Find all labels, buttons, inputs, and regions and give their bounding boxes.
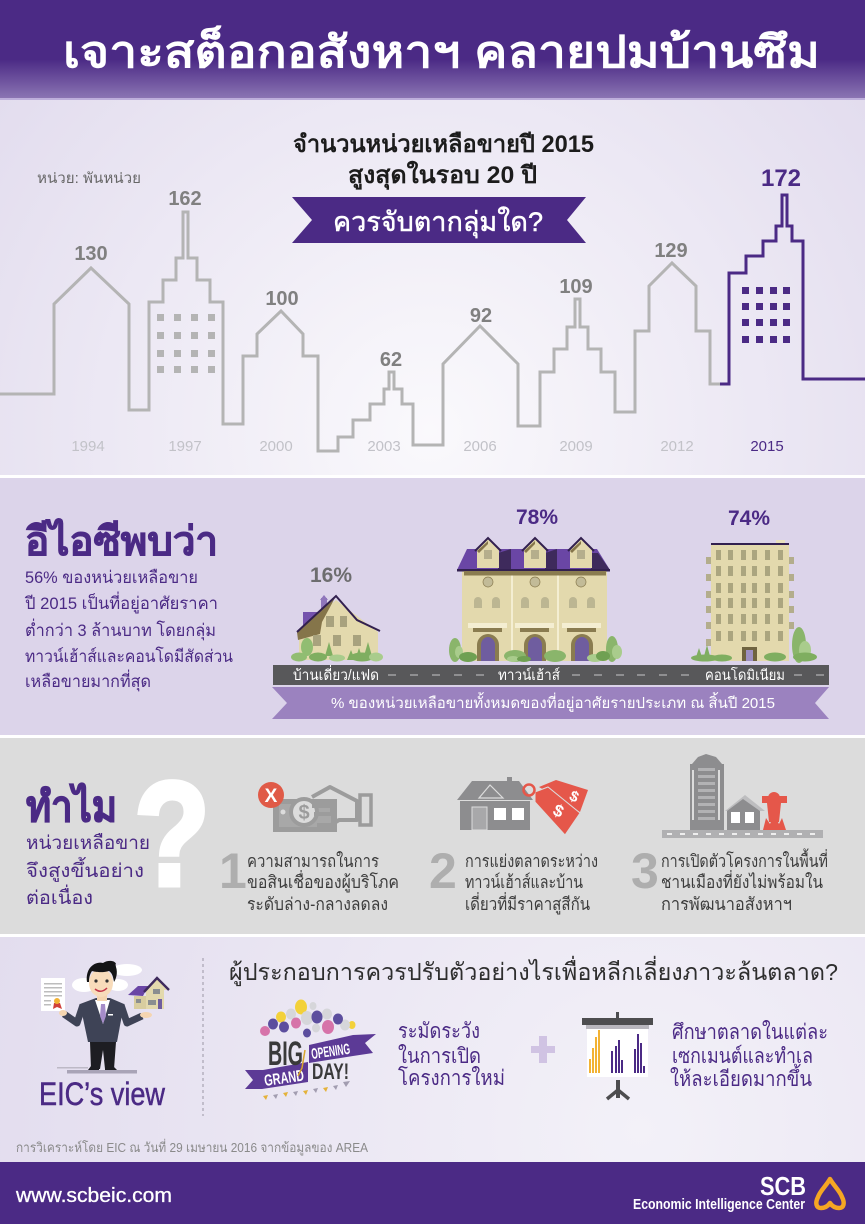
title: เจาะสต็อกอสังหาฯ คลายปมบ้านซึม bbox=[63, 25, 820, 77]
finding paragraph: ปี 2015 เป็นที่อยู่อาศัยราคา bbox=[24, 591, 218, 614]
callout banner: ควรจับตากลุ่มใด? bbox=[333, 206, 543, 239]
icon: house and price tags: $ bbox=[550, 800, 567, 822]
reason 3: การพัฒนาอสังหาฯ bbox=[661, 894, 792, 914]
footer bbox=[0, 1162, 865, 1224]
percentages: 78% bbox=[516, 506, 558, 529]
subheading: หน่วยเหลือขาย bbox=[26, 833, 150, 854]
reason 1: ระดับล่าง-กลางลดลง bbox=[247, 894, 388, 914]
finding paragraph: ทาวน์เฮ้าส์และคอนโดมีสัดส่วน bbox=[25, 646, 233, 666]
icon: big opening grand day balloons bbox=[245, 1000, 376, 1100]
advice 1 text: ในการเปิด bbox=[398, 1044, 481, 1068]
subheading: จึงสูงขึ้นอย่าง bbox=[26, 857, 144, 882]
plus sign bbox=[531, 1036, 555, 1063]
value labels bbox=[74, 165, 801, 371]
reason 2: ทาวน์เฮ้าส์และบ้าน bbox=[465, 872, 583, 892]
value labels: 109 bbox=[559, 276, 593, 298]
callout banner bbox=[292, 197, 586, 243]
Economic Intelligence Center: Economic Intelligence Center bbox=[633, 1197, 805, 1213]
panel: why unsold units keep rising bbox=[0, 738, 865, 934]
year labels: 2000 bbox=[259, 438, 293, 455]
finding paragraph: เหลือขายมากที่สุด bbox=[25, 669, 151, 692]
icon: house and price tags: $ bbox=[567, 787, 582, 807]
icon: detached house bbox=[291, 595, 383, 662]
illustration: businessman bbox=[41, 961, 169, 1074]
percentages: 16% bbox=[310, 564, 352, 587]
finding paragraph bbox=[24, 568, 233, 692]
icon: house and price tags bbox=[457, 777, 588, 835]
advice 1 text: ระมัดระวัง bbox=[398, 1020, 480, 1043]
value labels: 162 bbox=[168, 188, 202, 210]
year labels: 2012 bbox=[660, 438, 694, 455]
icon: condominium bbox=[691, 540, 817, 663]
panel: EIC's view bbox=[0, 937, 865, 1162]
percentages bbox=[310, 506, 770, 587]
road with type labels: บ้านเดี่ยว/แฟด bbox=[293, 665, 379, 684]
finding paragraph: 56% ของหน่วยเหลือขาย bbox=[25, 568, 198, 587]
value labels: 172 bbox=[761, 165, 801, 192]
icon: big opening grand day balloons: GRAND bbox=[263, 1068, 305, 1090]
panel: EIC finding bbox=[0, 478, 865, 735]
value labels: 100 bbox=[265, 288, 299, 310]
icon: townhouse bbox=[449, 538, 622, 662]
reason 2: การแย่งตลาดระหว่าง bbox=[465, 851, 598, 871]
year labels: 2015 bbox=[750, 438, 784, 455]
icon: credit refused bbox=[258, 782, 371, 832]
heading: EIC found: อีไอซีพบว่า bbox=[25, 518, 218, 564]
value labels: 92 bbox=[470, 305, 492, 327]
question heading: ผู้ประกอบการควรปรับตัวอย่างไรเพื่อหลีกเลี่ยงภาวะล้นตลาด? bbox=[229, 955, 838, 987]
SCB name: SCB bbox=[760, 1171, 806, 1201]
icon: presentation board bbox=[582, 1012, 653, 1099]
road with type labels bbox=[273, 665, 829, 685]
reason 1: ขอสินเชื่อของผู้บริโภค bbox=[247, 870, 399, 893]
reason 1: 1 bbox=[219, 843, 247, 899]
reason 3: การเปิดตัวโครงการในพื้นที่ bbox=[661, 848, 828, 871]
road with type labels: ทาวน์เฮ้าส์ bbox=[498, 667, 560, 684]
icon: suburb tower, house, scarecrow bbox=[662, 754, 823, 838]
year labels: 2003 bbox=[367, 438, 401, 455]
reason 2: 2 bbox=[429, 843, 457, 899]
year labels: 1994 bbox=[71, 438, 105, 455]
percentages: 74% bbox=[728, 507, 770, 530]
windows 2015 bbox=[742, 287, 790, 343]
advice 2 text: เซกเมนต์และทำเล bbox=[672, 1044, 813, 1068]
windows 1997 bbox=[157, 314, 215, 373]
heading: highest in 20 years: จำนวนหน่วยเหลือขายปี 2015 bbox=[293, 131, 594, 158]
year labels bbox=[71, 438, 784, 455]
icon: big opening grand day balloons: BIG bbox=[268, 1035, 303, 1073]
ribbon caption: % ของหน่วยเหลือขายทั้งหมดของที่อยู่อาศัยรายประเภท ณ สิ้นปี 2015 bbox=[331, 692, 775, 712]
reason 3 bbox=[631, 843, 828, 914]
year labels: 2009 bbox=[559, 438, 593, 455]
year labels: 1997 bbox=[168, 438, 202, 455]
finding paragraph: ต่ำกว่า 3 ล้านบาท โดยกลุ่ม bbox=[25, 618, 216, 641]
icon: SCB logo bbox=[816, 1179, 844, 1208]
year labels: 2006 bbox=[463, 438, 497, 455]
advice 2 text: ศึกษาตลาดในแต่ละ bbox=[672, 1020, 828, 1044]
advice 2 text bbox=[670, 1020, 828, 1091]
website: www.scbeic.com bbox=[15, 1185, 172, 1207]
reason 1: ความสามารถในการ bbox=[247, 851, 379, 871]
value labels: 129 bbox=[654, 240, 688, 262]
heading: highest in 20 years: สูงสุดในรอบ 20 ปี bbox=[348, 160, 537, 191]
icon: credit refused: X bbox=[265, 786, 278, 807]
reason 2: เดี่ยวที่มีราคาสูสีกัน bbox=[465, 892, 590, 915]
heading: why: ทำไม bbox=[26, 782, 117, 830]
source note: การวิเคราะห์โดย EIC ณ วันที่ 29 เมษายน 2016 จากข้อมูลของ AREA bbox=[16, 1139, 368, 1156]
icon: big opening grand day balloons: OPENING bbox=[310, 1041, 351, 1063]
reason 3: 3 bbox=[631, 843, 659, 899]
heading: highest in 20 years bbox=[293, 131, 594, 191]
subheading bbox=[26, 833, 150, 909]
panel: skyline chart of unsold units bbox=[0, 100, 865, 475]
skyline line chart grey bbox=[0, 212, 720, 451]
icon: big opening grand day balloons: DAY! bbox=[312, 1059, 349, 1084]
ribbon caption bbox=[272, 687, 829, 719]
road with type labels: คอนโดมิเนียม bbox=[705, 666, 785, 684]
reason 3: ชานเมืองที่ยังไม่พร้อมใน bbox=[661, 870, 823, 892]
panel: title header bbox=[0, 0, 865, 100]
advice 2 text: ให้ละเอียดมากขึ้น bbox=[670, 1064, 812, 1091]
big question mark: ? bbox=[134, 752, 210, 917]
reason 2 bbox=[429, 843, 598, 915]
icon: credit refused: $ bbox=[298, 802, 310, 824]
advice 1 text bbox=[398, 1020, 505, 1090]
advice 1 text: โครงการใหม่ bbox=[398, 1066, 505, 1090]
value labels: 130 bbox=[74, 243, 108, 265]
subheading: ต่อเนื่อง bbox=[26, 884, 93, 909]
EIC's view label: EIC’s view bbox=[39, 1076, 166, 1112]
value labels: 62 bbox=[380, 349, 402, 371]
skyline line 2015 purple bbox=[720, 195, 865, 384]
unit label: หน่วย: พันหน่วย bbox=[37, 171, 141, 187]
reason 1 bbox=[219, 843, 399, 914]
